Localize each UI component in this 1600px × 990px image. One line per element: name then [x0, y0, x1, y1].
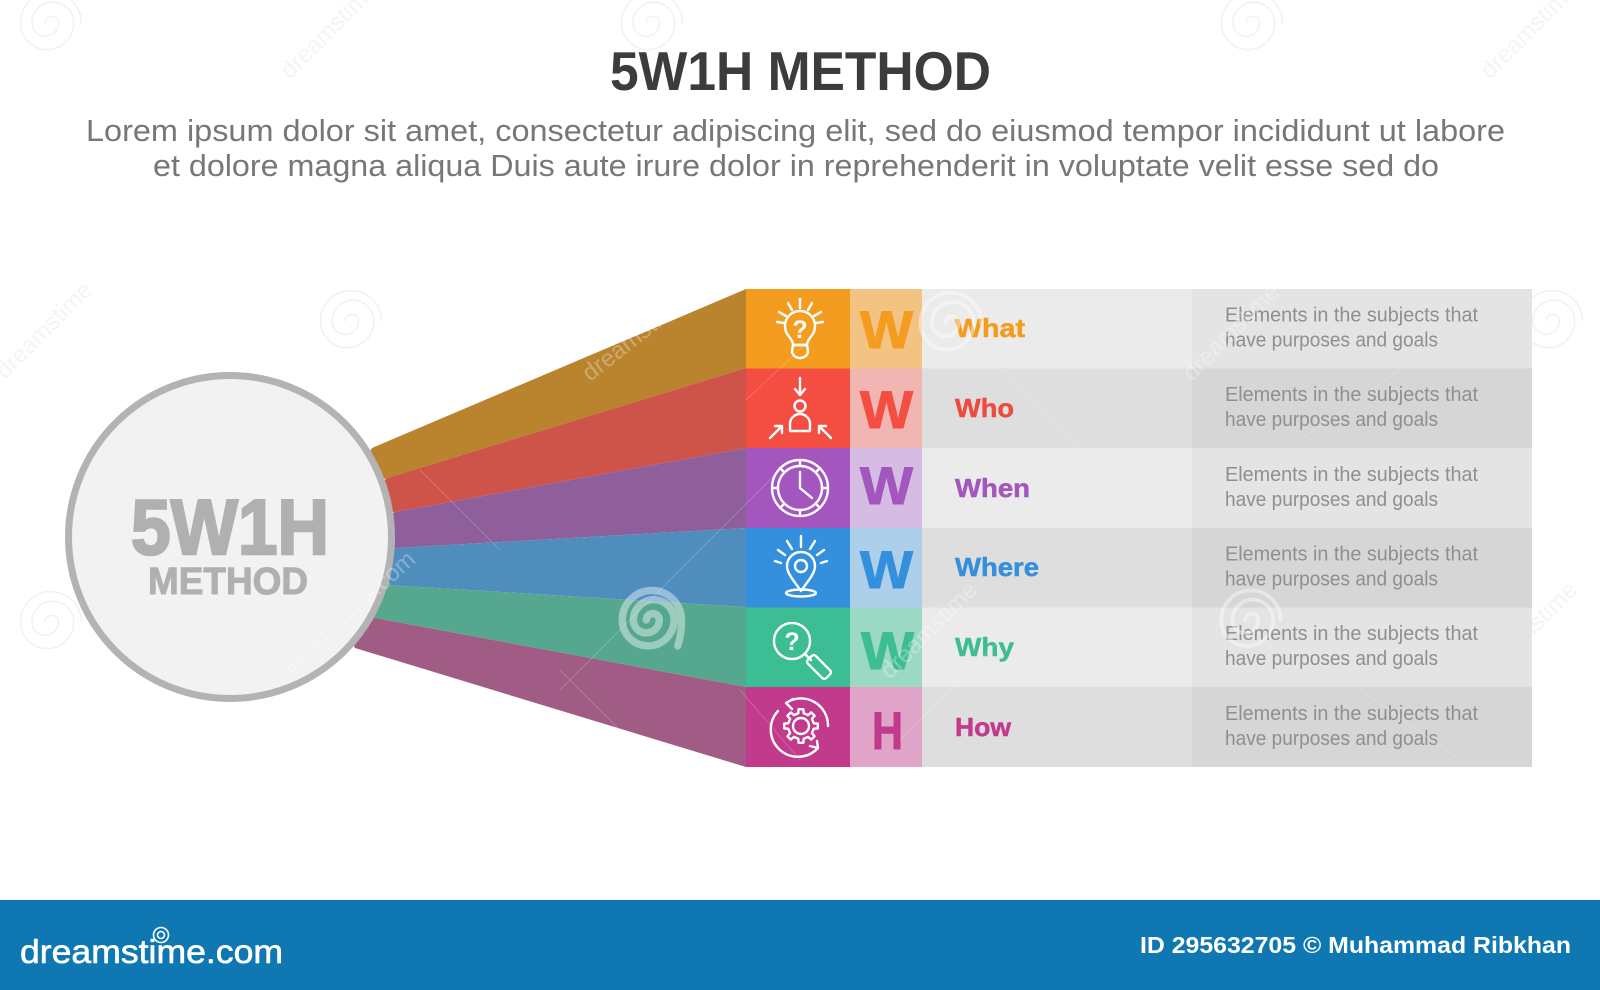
- icon: magnifier question: [774, 623, 832, 680]
- watermark overlay: dreamstime: [875, 576, 983, 684]
- row: When: [746, 448, 1532, 528]
- funnel ribbons connecting circle to rows: [330, 289, 746, 767]
- icon: light bulb question: ?: [792, 316, 808, 344]
- description: [1225, 542, 1478, 590]
- description: Elements in the subjects that: [1225, 702, 1478, 725]
- description: [1225, 622, 1478, 670]
- label Why: Why: [955, 632, 1015, 662]
- icon: logo spiral: [154, 928, 168, 942]
- watermark overlay: dreamstime: [577, 288, 692, 387]
- icon: clock: [772, 460, 828, 516]
- description: have purposes and goals: [1225, 328, 1438, 352]
- icon: gear with cycle arrows: [771, 698, 828, 757]
- description: have purposes and goals: [1225, 408, 1438, 431]
- description: Elements in the subjects that: [1225, 622, 1478, 645]
- watermark spirals on white: [20, 0, 1582, 649]
- letter W: W: [861, 622, 914, 681]
- description: [1225, 702, 1478, 750]
- description: have purposes and goals: [1225, 647, 1438, 670]
- label When: When: [955, 473, 1030, 503]
- central circle: 5W1H method: 5W1H: [131, 483, 329, 571]
- subtitle text: et dolore magna aliqua Duis aute irure dolor in reprehenderit in voluptate velit esse sed do: [153, 148, 1439, 183]
- footer credit: ID 295632705 © Muhammad Ribkhan: [1140, 932, 1571, 958]
- subtitle text: Lorem ipsum dolor sit amet, consectetur adipiscing elit, sed do eiusmod tempor incididunt ut labore: [86, 113, 1505, 148]
- row: What: [746, 289, 1532, 368]
- letter W: W: [860, 541, 913, 600]
- footer logo: dreamstime.com: dreamstime.com: [20, 933, 283, 970]
- description: [1225, 463, 1478, 511]
- letter W: W: [860, 381, 913, 440]
- watermark overlay: dreamstime.com: [271, 546, 421, 684]
- description: have purposes and goals: [1225, 488, 1438, 511]
- description: [1225, 304, 1478, 352]
- letter W: W: [860, 301, 913, 360]
- row: How: [746, 687, 1532, 767]
- row: Why: [746, 608, 1532, 687]
- watermark overlay: dreamstime: [1177, 278, 1285, 386]
- description: have purposes and goals: [1225, 727, 1438, 750]
- row: Where: [746, 528, 1532, 608]
- description: [1225, 383, 1478, 431]
- letter W: W: [860, 457, 913, 516]
- description: Elements in the subjects that: [1225, 304, 1478, 326]
- icon: light bulb question: [777, 299, 823, 358]
- description: Elements in the subjects that: [1225, 383, 1478, 406]
- icon: location pin: [775, 536, 827, 596]
- row: Who: [746, 368, 1532, 448]
- subtitle text: [86, 113, 1505, 183]
- label Who: Who: [955, 393, 1014, 423]
- watermark overlay: [0, 0, 1583, 760]
- letter H: H: [872, 702, 903, 761]
- label How: How: [955, 712, 1012, 742]
- central circle: 5W1H method: METHOD: [148, 561, 308, 603]
- label Where: Where: [955, 552, 1039, 582]
- icon: person with arrows: [770, 378, 831, 438]
- title: 5W1H METHOD: [610, 40, 991, 102]
- description: Elements in the subjects that: [1225, 463, 1478, 486]
- watermark overlay: dreamstime: [1475, 576, 1583, 684]
- description: have purposes and goals: [1225, 568, 1438, 590]
- central circle: 5W1H method: [68, 376, 392, 698]
- icon: magnifier question: ?: [784, 628, 800, 656]
- label What: What: [955, 313, 1025, 343]
- footer bar: [0, 900, 1600, 990]
- description: Elements in the subjects that: [1225, 542, 1478, 566]
